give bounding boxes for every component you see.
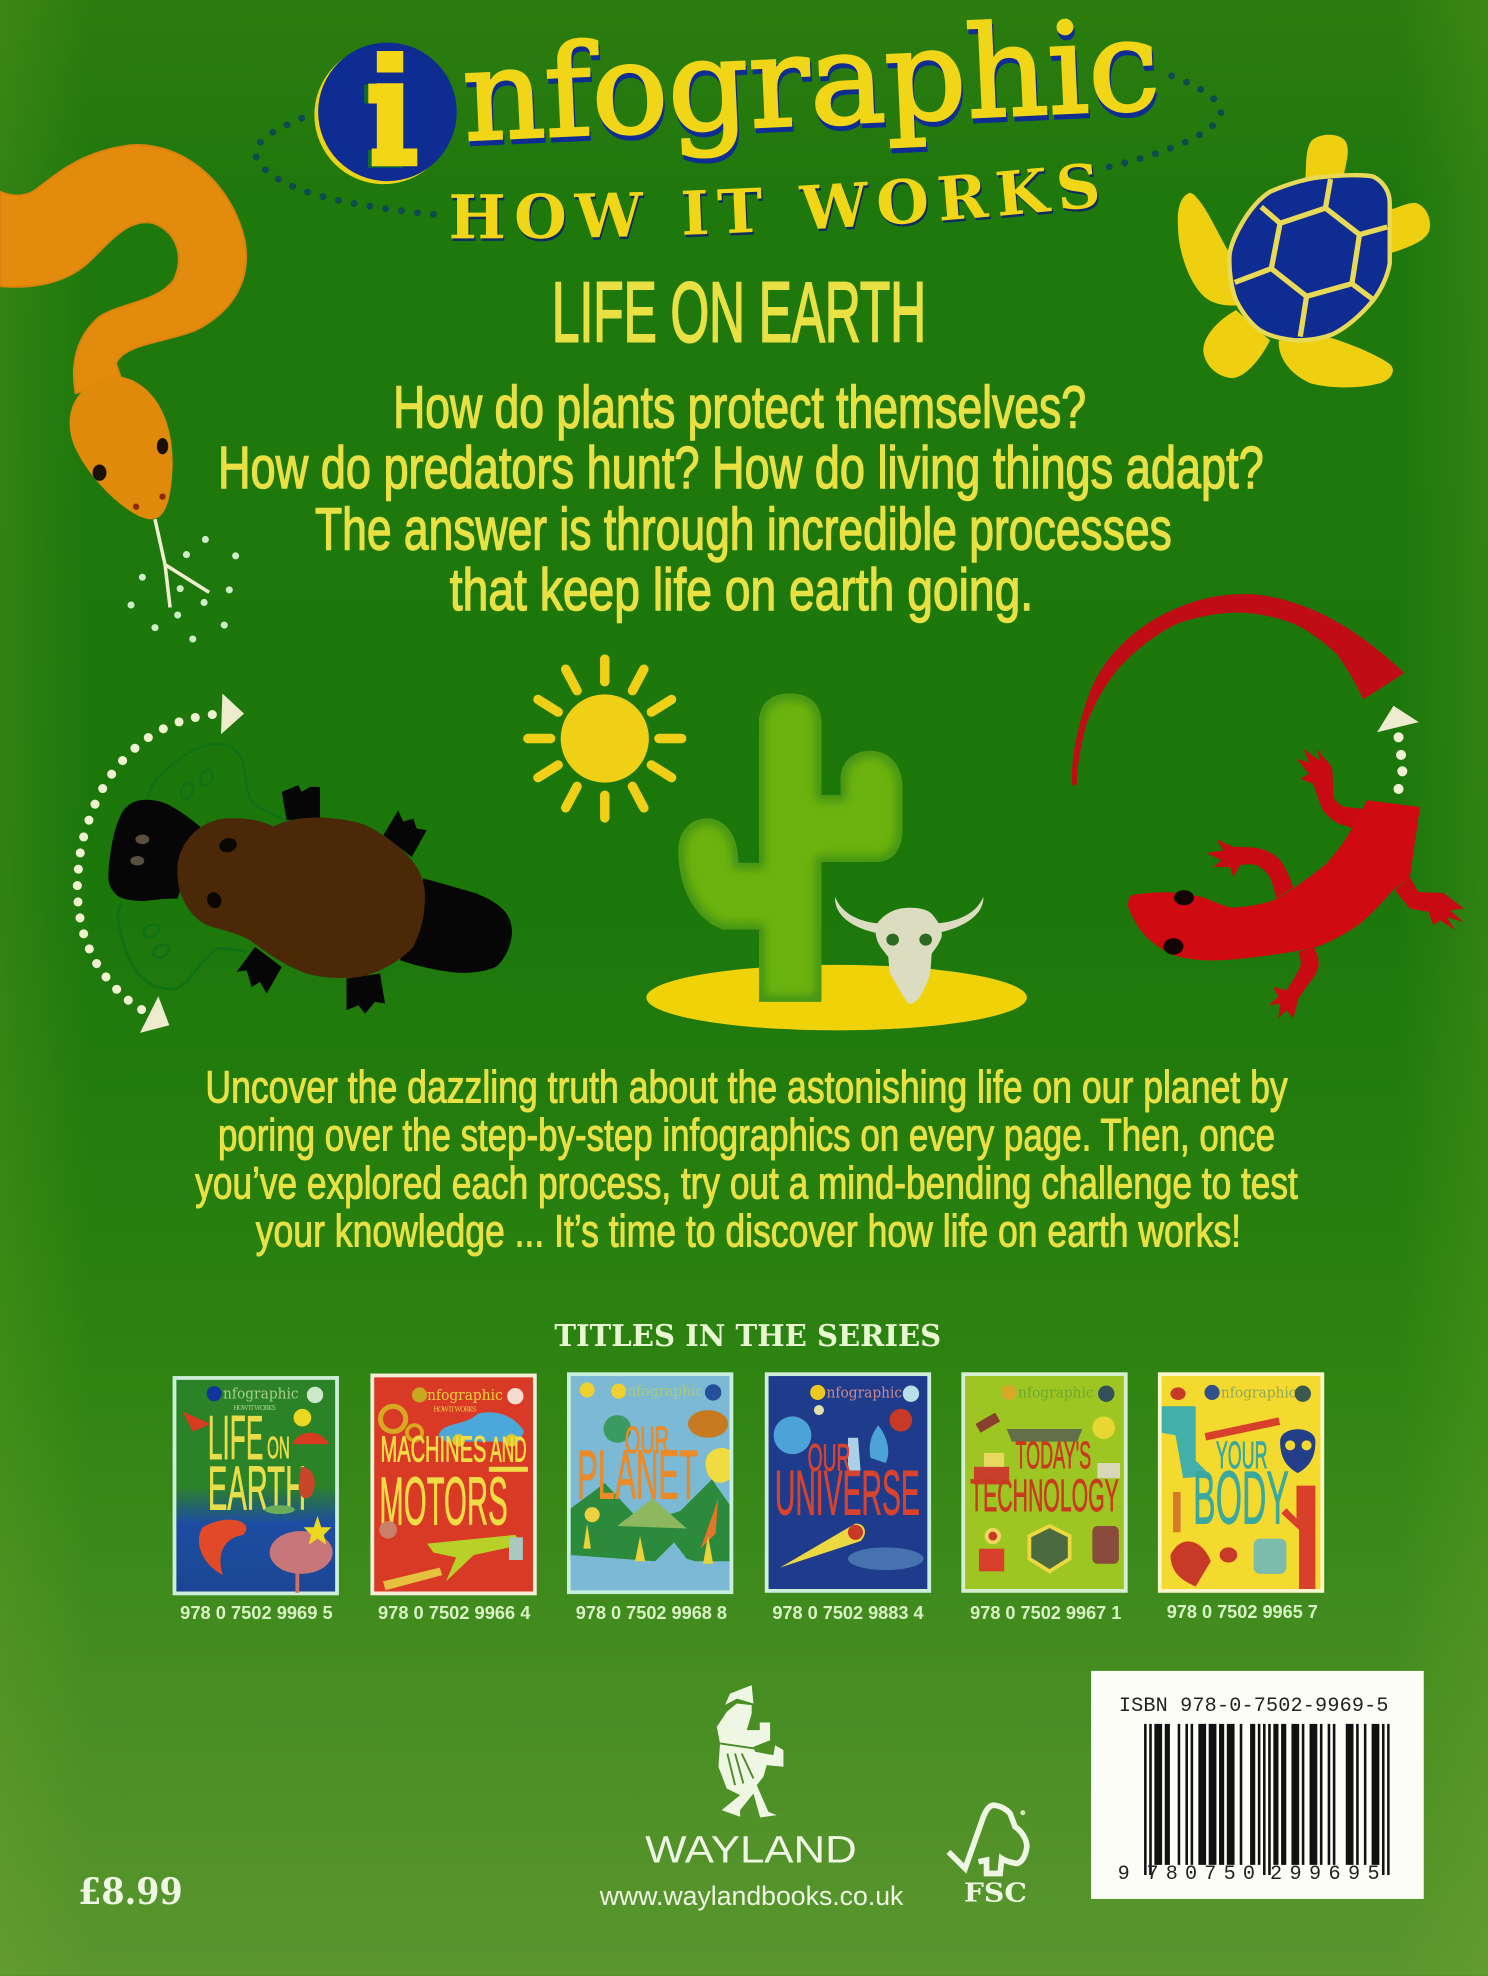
price: £8.99 (78, 1870, 183, 1913)
dotted arrow (1377, 706, 1419, 794)
wayland figure (717, 1685, 783, 1818)
fsc logo (948, 1805, 1027, 1908)
book: today's technology (961, 1372, 1128, 1593)
fsc tree (948, 1805, 1027, 1873)
fsc text: FSC (964, 1877, 1027, 1908)
wayland logo (599, 1685, 904, 1911)
sand (646, 965, 1027, 1030)
wordmark wayland: WAYLAND (645, 1829, 857, 1871)
book: life on earth: ON (267, 1432, 290, 1465)
illustration: snake (0, 145, 246, 643)
snake head (70, 376, 173, 519)
illustration: turtle (1178, 135, 1430, 387)
intro text: that keep life on earth going. (450, 556, 1033, 623)
bull skull (835, 897, 983, 1004)
barcode digits: 299695 (1270, 1863, 1380, 1886)
illustration: lizard (1072, 594, 1464, 1018)
back cover infographic: TECHNOLOGY (970, 1470, 1119, 1521)
illustration: cactus and skull (646, 694, 1027, 1030)
book: machines and motors: HOW IT WORKS (433, 1406, 476, 1413)
book: your body (1158, 1372, 1324, 1593)
barcode digits: 9 (1118, 1863, 1130, 1886)
cactus (678, 694, 902, 1002)
book: our planet (567, 1372, 733, 1594)
platypus feet (237, 785, 427, 1014)
book: machines and motors (370, 1374, 537, 1595)
how it works arc: HOW IT WORKS (451, 163, 1098, 239)
book: machines and motors: AND (490, 1431, 527, 1470)
barcode digits (1118, 1863, 1380, 1886)
platypus body (177, 818, 425, 978)
book: life on earth: EARTH (208, 1455, 306, 1524)
description text (195, 1062, 1298, 1256)
snake eyes (93, 438, 168, 481)
lizard body (1128, 800, 1420, 960)
venom dots (128, 536, 239, 643)
book: our planet: PLANET (577, 1435, 698, 1513)
snake nostrils (133, 493, 166, 510)
back cover infographic: UNIVERSE (775, 1459, 920, 1529)
series logo (252, 0, 1224, 242)
intro text: How do plants protect themselves? (393, 373, 1086, 440)
book: our planet: nfographic (627, 1382, 703, 1400)
book: your body: YOUR (1216, 1435, 1268, 1477)
book: life on earth: nfographic (223, 1385, 299, 1403)
webbed foot outlines (118, 744, 283, 989)
title: LIFE ON EARTH (552, 265, 926, 361)
logo circle with letter i: i (364, 26, 416, 202)
sun disc (561, 694, 649, 783)
isbn numbers: 978 0 7502 9968 8 (576, 1603, 727, 1624)
book: our planet: OUR (625, 1420, 669, 1462)
logo circle with letter i (314, 26, 457, 202)
illustration: sun (528, 659, 682, 818)
dotted movement arc (73, 710, 217, 1014)
dotted orbit (256, 76, 1221, 214)
isbn numbers: 978 0 7502 9965 7 (1167, 1602, 1318, 1623)
book: your body: BODY (1193, 1456, 1289, 1540)
wordmark: nfographic (461, 0, 1164, 175)
barcode bars (1144, 1724, 1390, 1875)
book: our universe: OUR (808, 1438, 850, 1480)
description text: your knowledge ... It’s time to discover how life on earth works! (256, 1205, 1241, 1256)
snake body (0, 145, 246, 393)
isbn numbers (180, 1602, 1318, 1624)
isbn line: ISBN 978-0-7502-9969-5 (1119, 1695, 1388, 1718)
isbn numbers: 978 0 7502 9967 1 (970, 1603, 1121, 1624)
barcode digits: 780750 (1147, 1863, 1255, 1886)
book: our universe: nfographic (827, 1383, 902, 1401)
intro text: The answer is through incredible processes (315, 496, 1172, 563)
lizard limbs (1207, 749, 1464, 1018)
series heading: TITLES IN THE SERIES (554, 1319, 941, 1354)
book: machines and motors: MOTORS (379, 1464, 508, 1540)
barcode label (1091, 1671, 1424, 1899)
book: today's technology: TODAY'S (1016, 1435, 1091, 1477)
platypus tail (400, 878, 512, 973)
shell plates (1235, 179, 1387, 337)
illustration: platypus (73, 694, 512, 1033)
sun rays (528, 659, 682, 818)
book: today's technology: nfographic (1018, 1383, 1094, 1401)
book: machines and motors: nfographic (427, 1386, 503, 1404)
platypus bill (108, 800, 200, 901)
book: machines and motors: MACHINES (381, 1429, 486, 1470)
lizard eyes (1163, 890, 1194, 955)
arrowheads (140, 694, 244, 1033)
book: life on earth: HOW IT WORKS (233, 1405, 276, 1412)
severed tail (1072, 594, 1404, 785)
snake tongue (155, 519, 209, 607)
book: life on earth: LIFE (208, 1404, 263, 1473)
book: our universe (765, 1372, 931, 1593)
website: www.waylandbooks.co.uk (599, 1881, 904, 1911)
isbn numbers: 978 0 7502 9966 4 (378, 1603, 531, 1624)
platypus eyes (205, 836, 238, 910)
isbn numbers: 978 0 7502 9883 4 (772, 1603, 924, 1624)
turtle shell (1229, 175, 1390, 340)
book: your body: nfographic (1221, 1383, 1296, 1401)
how it works arc: HOW IT WORKS (452, 166, 1099, 242)
bill nostrils (130, 835, 149, 866)
intro text (218, 373, 1264, 623)
book: life on earth (173, 1376, 339, 1595)
turtle flippers (1178, 135, 1430, 387)
isbn numbers: 978 0 7502 9969 5 (180, 1603, 333, 1624)
